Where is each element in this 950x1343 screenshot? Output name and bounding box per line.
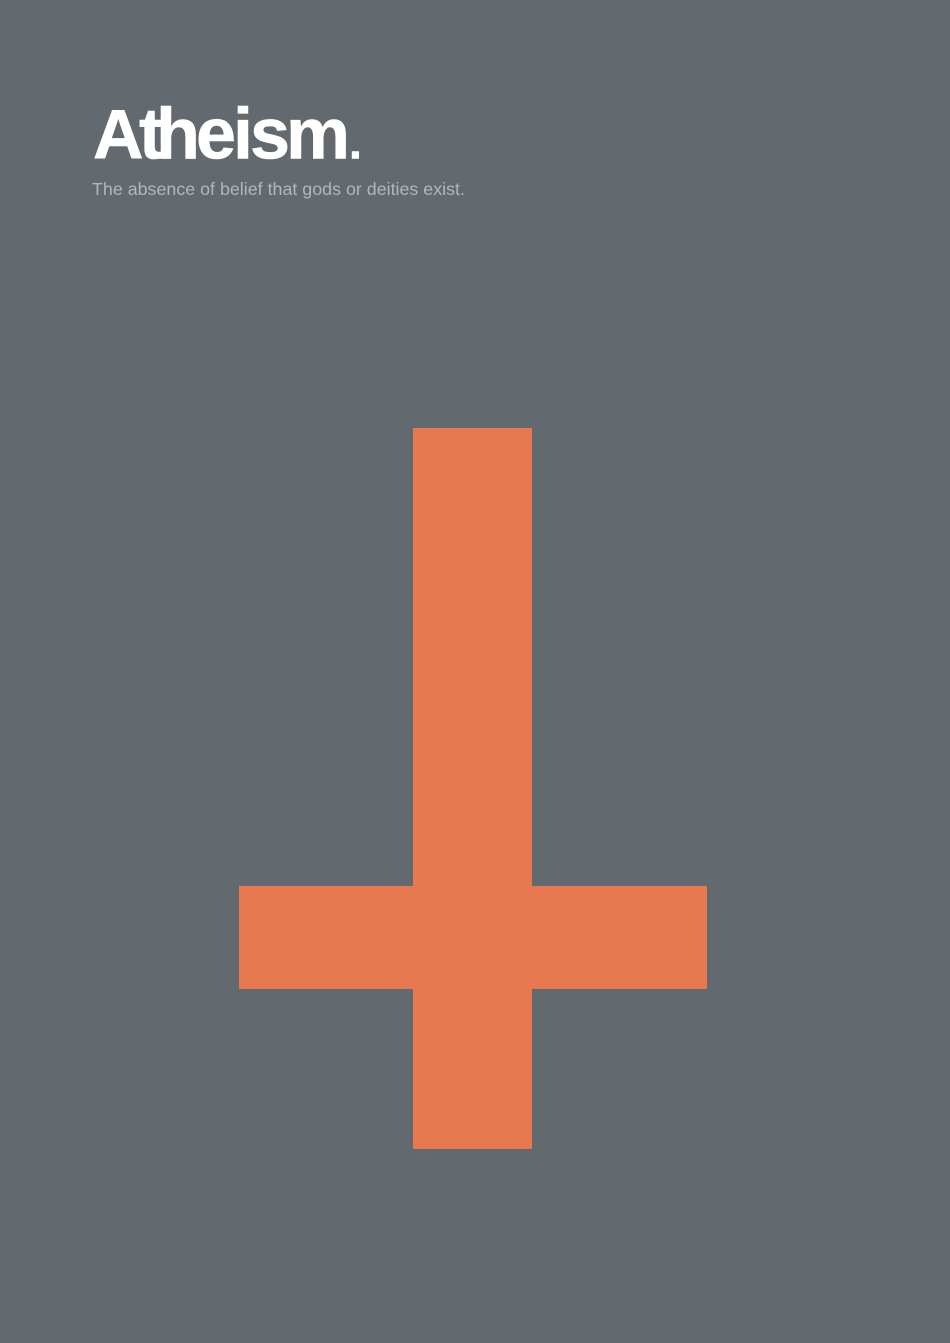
icon: inverted cross <box>239 428 707 1149</box>
title: A <box>93 96 144 174</box>
cross horizontal bar <box>239 886 707 989</box>
subtitle: definition text: The absence of belief that gods or deities exist. <box>92 179 465 199</box>
cross vertical stem <box>413 428 532 1149</box>
title: theism <box>139 94 350 174</box>
title: . <box>349 116 362 168</box>
